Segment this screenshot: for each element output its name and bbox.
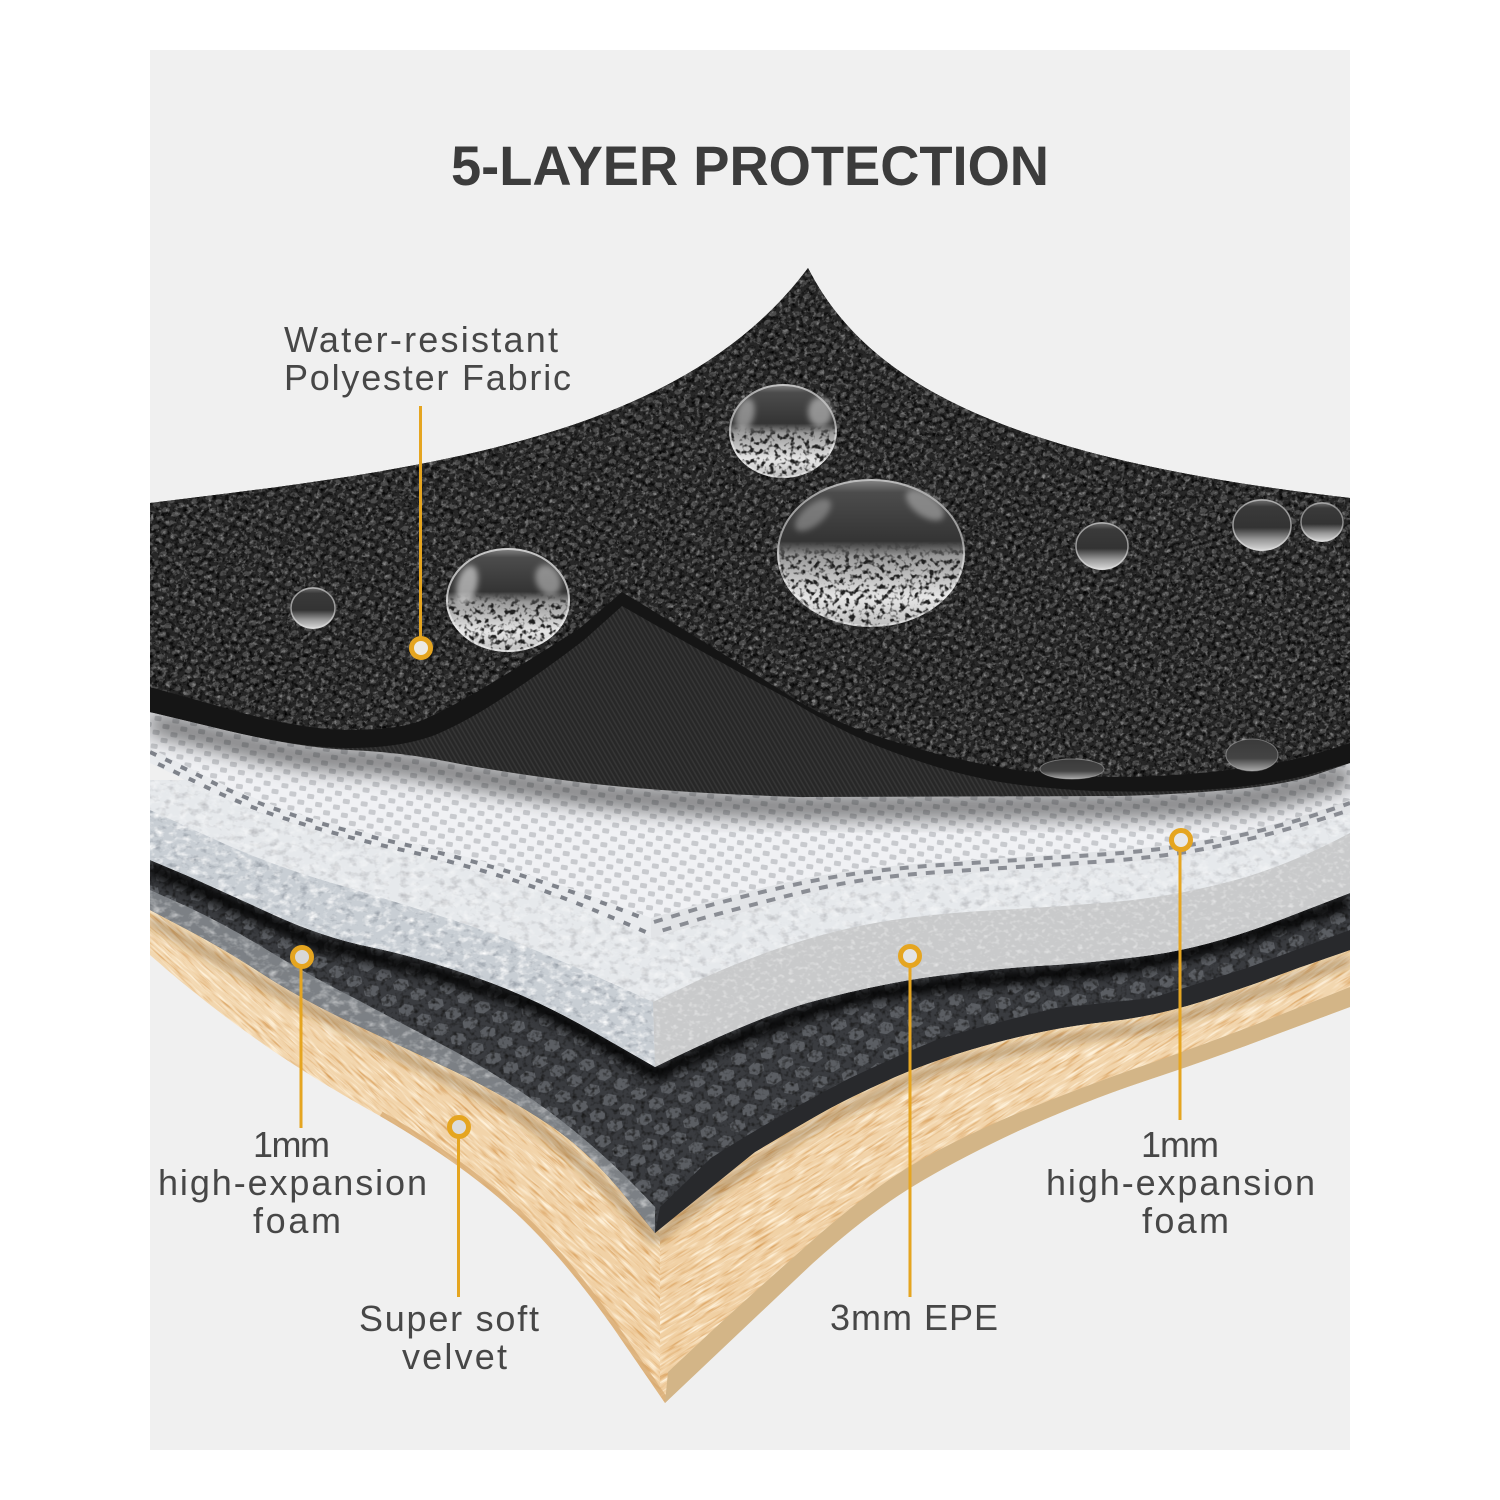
callout: 3mm EPE <box>830 946 998 1338</box>
callout: super soft velvet <box>359 1118 539 1377</box>
panel: background <box>150 50 1350 1450</box>
label: high-expansion <box>1046 1162 1315 1203</box>
leader line <box>908 964 912 1297</box>
upper droplet <box>729 384 837 478</box>
leader line <box>419 406 422 640</box>
leader line <box>300 965 302 1128</box>
label: velvet <box>402 1336 507 1377</box>
label: high-expansion <box>158 1162 427 1203</box>
layer 1: water-resistant polyester fabric <box>150 268 1350 797</box>
label: 3mm EPE <box>830 1297 998 1338</box>
large droplet <box>777 479 965 627</box>
label: Water-resistant <box>284 319 558 360</box>
callout: water-resistant polyester fabric <box>284 319 571 658</box>
marker <box>450 1118 468 1136</box>
label: 1mm <box>253 1124 330 1165</box>
fabric weave surface <box>150 268 1350 777</box>
layered material illustration <box>150 268 1350 1410</box>
layer 4 shadow on velvet <box>150 920 1350 1240</box>
layer 2: 1mm high-expansion foam <box>150 700 1350 938</box>
layer 3 shadow on layer 4 <box>150 868 1350 1075</box>
label: foam <box>1142 1200 1229 1241</box>
callout: left 1mm high-expansion foam <box>158 948 427 1241</box>
partial droplet 2 <box>1040 759 1104 779</box>
leader line <box>457 1135 460 1297</box>
layer 3: 3mm EPE <box>150 780 1350 1067</box>
callout: right 1mm high-expansion foam <box>1046 830 1315 1241</box>
marker <box>292 948 312 966</box>
title: 5-LAYER PROTECTION <box>451 134 1049 197</box>
label: foam <box>253 1200 341 1241</box>
small droplet 2 <box>1075 522 1129 570</box>
fabric rim <box>150 268 1350 792</box>
fabric underside <box>150 606 1350 797</box>
marker <box>412 638 430 658</box>
layer 4: 1mm high-expansion foam <box>150 850 1350 1233</box>
label: 1mm <box>1141 1124 1219 1165</box>
partial droplet 1 <box>1226 739 1278 771</box>
small droplet 4 <box>1300 502 1344 542</box>
marker <box>1172 830 1190 850</box>
left droplet <box>446 548 570 652</box>
fabric shadow on layer 2 <box>150 722 1350 807</box>
label: Super soft <box>359 1298 539 1339</box>
water droplets <box>290 384 1344 779</box>
marker <box>900 946 920 966</box>
layer 5: velvet <box>150 880 1350 1410</box>
label: Polyester Fabric <box>284 357 571 398</box>
leader line <box>1178 848 1182 1120</box>
small droplet 3 <box>1232 499 1292 551</box>
small droplet 1 <box>290 587 336 629</box>
